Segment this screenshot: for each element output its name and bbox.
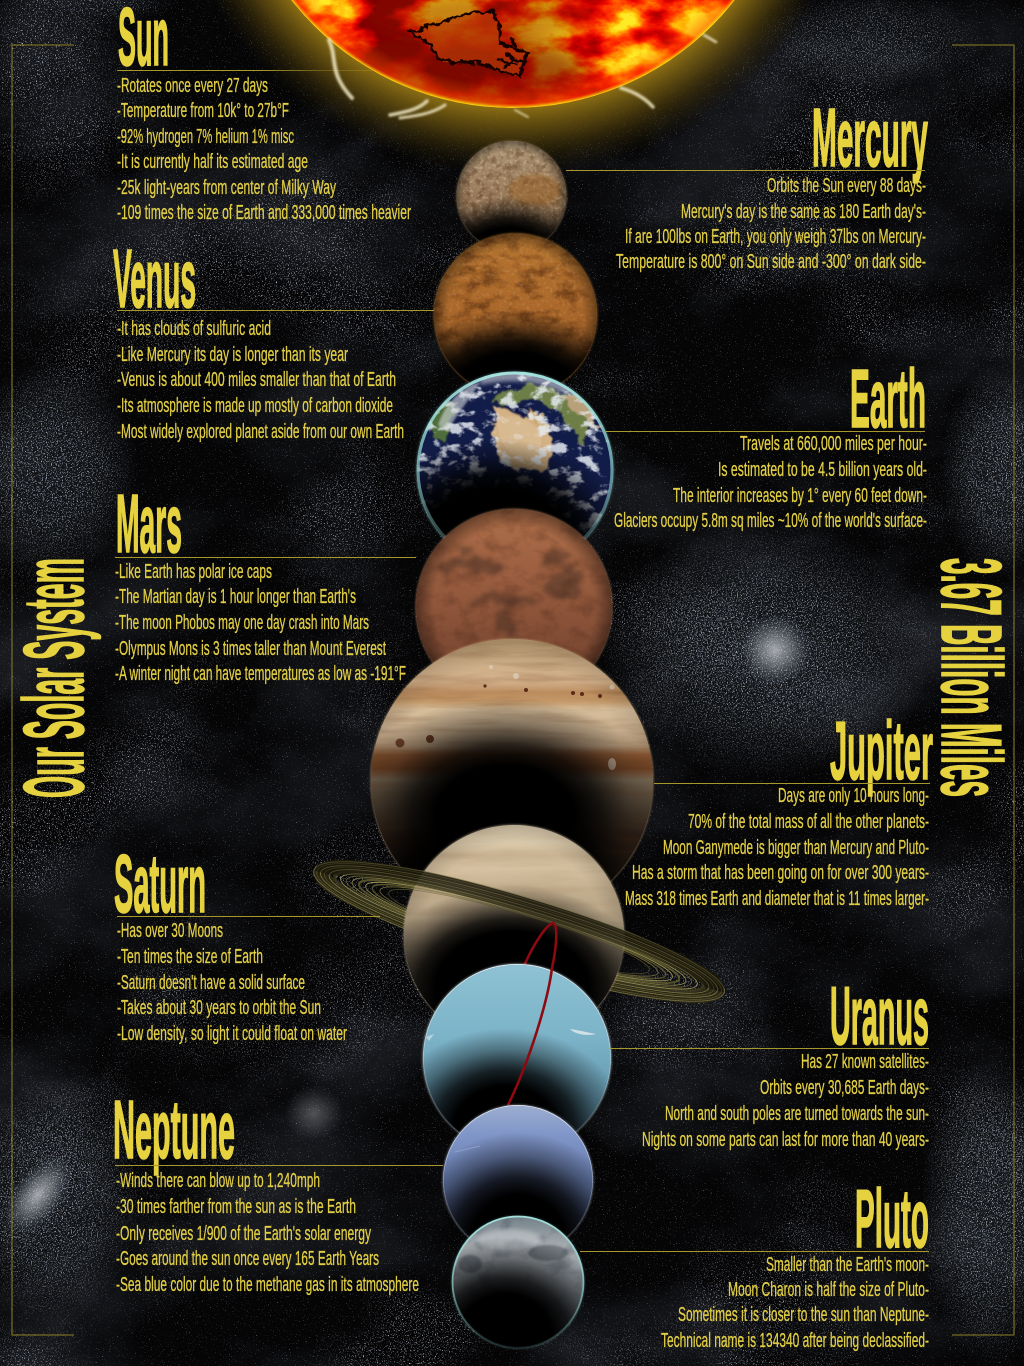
heading: Saturn facts: -Ten times the size of Earth <box>117 946 263 968</box>
heading: Mars facts: -A winter night can have temperatures as low as -191°F <box>115 663 406 685</box>
heading: Mercury facts <box>566 91 928 273</box>
planet: Jupiter <box>369 638 655 882</box>
heading: Sun facts: -109 times the size of Earth and 333,000 times heavier <box>117 202 411 224</box>
heading: Saturn facts: -Has over 30 Moons <box>117 920 223 942</box>
heading: Venus facts: -Its atmosphere is made up mostly of carbon dioxide <box>117 395 393 417</box>
heading: Saturn facts: -Low density, so light it could float on water <box>117 1023 347 1045</box>
heading: Venus facts: Venus <box>113 232 196 325</box>
heading: Saturn facts <box>114 837 380 1045</box>
heading: Saturn facts: Saturn <box>114 837 206 930</box>
planet: Mars <box>414 507 614 666</box>
planet: Saturn <box>402 823 626 1013</box>
heading: Mercury facts: Orbits the Sun every 88 days- <box>767 175 926 197</box>
Sun leader line <box>117 70 372 72</box>
planet: Venus <box>432 232 599 384</box>
heading: Uranus facts: Has 27 known satellites- <box>801 1051 929 1073</box>
planet: Neptune <box>441 1103 595 1238</box>
heading: Saturn facts: -Saturn doesn't have a solid surface <box>117 972 305 994</box>
heading: Earth facts <box>605 352 927 532</box>
heading: Saturn facts: -Takes about 30 years to orbit the Sun <box>117 997 321 1019</box>
sun glow <box>163 0 863 176</box>
planet: Uranus <box>421 962 613 1134</box>
heading: Venus facts: -Most widely explored planet aside from our own Earth <box>117 421 404 443</box>
text: Our Solar System <box>7 558 102 798</box>
heading: Neptune facts: -Sea blue color due to the methane gas in its atmosphere <box>116 1274 419 1296</box>
planet: Earth <box>414 370 616 540</box>
heading: Uranus facts <box>610 969 929 1151</box>
heading: Venus facts: -It has clouds of sulfuric acid <box>117 318 271 340</box>
heading: Mars facts: -Olympus Mons is 3 times taller than Mount Everest <box>115 638 386 660</box>
planet: Pluto <box>450 1214 586 1350</box>
heading: Neptune facts: -Winds there can blow up to 1,240mph <box>116 1170 320 1192</box>
heading: Sun facts: -25k light-years from center of Milky Way <box>117 177 336 199</box>
heading: Venus facts <box>113 232 434 443</box>
heading: Neptune facts: -Only receives 1/900 of the Earth's solar energy <box>116 1223 371 1245</box>
Saturn rings, back half <box>304 837 734 1026</box>
heading: Mars facts <box>115 477 416 685</box>
heading: Mars facts: -The Martian day is 1 hour longer than Earth's <box>115 586 356 608</box>
planet: Uranus ring <box>524 923 556 968</box>
heading: Neptune facts: -30 times farther from the sun as is the Earth <box>116 1196 356 1218</box>
text: 3.67 Billion Miles <box>923 558 1018 797</box>
heading: Mars facts: Mars <box>116 477 182 570</box>
icon: sun <box>291 0 735 121</box>
heading: Mars facts: -The moon Phobos may one day crash into Mars <box>115 612 369 634</box>
heading: Sun facts: -It is currently half its estimated age <box>117 151 308 173</box>
heading: Jupiter facts <box>625 704 933 910</box>
heading: Sun facts: -92% hydrogen 7% helium 1% misc <box>117 126 294 148</box>
heading: Sun facts: -Temperature from 10k° to 27b°F <box>117 100 289 122</box>
heading: Neptune facts: Neptune <box>113 1083 235 1176</box>
heading: Venus facts: -Venus is about 400 miles smaller than that of Earth <box>117 369 396 391</box>
heading: Neptune facts: -Goes around the sun once every 165 Earth Years <box>116 1248 379 1270</box>
Saturn rings, band across planet <box>314 860 725 992</box>
heading: Venus facts: -Like Mercury its day is longer than its year <box>117 344 348 366</box>
heading: Neptune facts <box>113 1083 443 1296</box>
heading: Sun facts: -Rotates once every 27 days <box>117 75 268 97</box>
planet: Mercury <box>454 140 568 242</box>
heading: Mars facts: -Like Earth has polar ice caps <box>115 561 272 583</box>
heading: Pluto facts <box>580 1172 929 1352</box>
heading: Sun facts <box>117 0 411 224</box>
